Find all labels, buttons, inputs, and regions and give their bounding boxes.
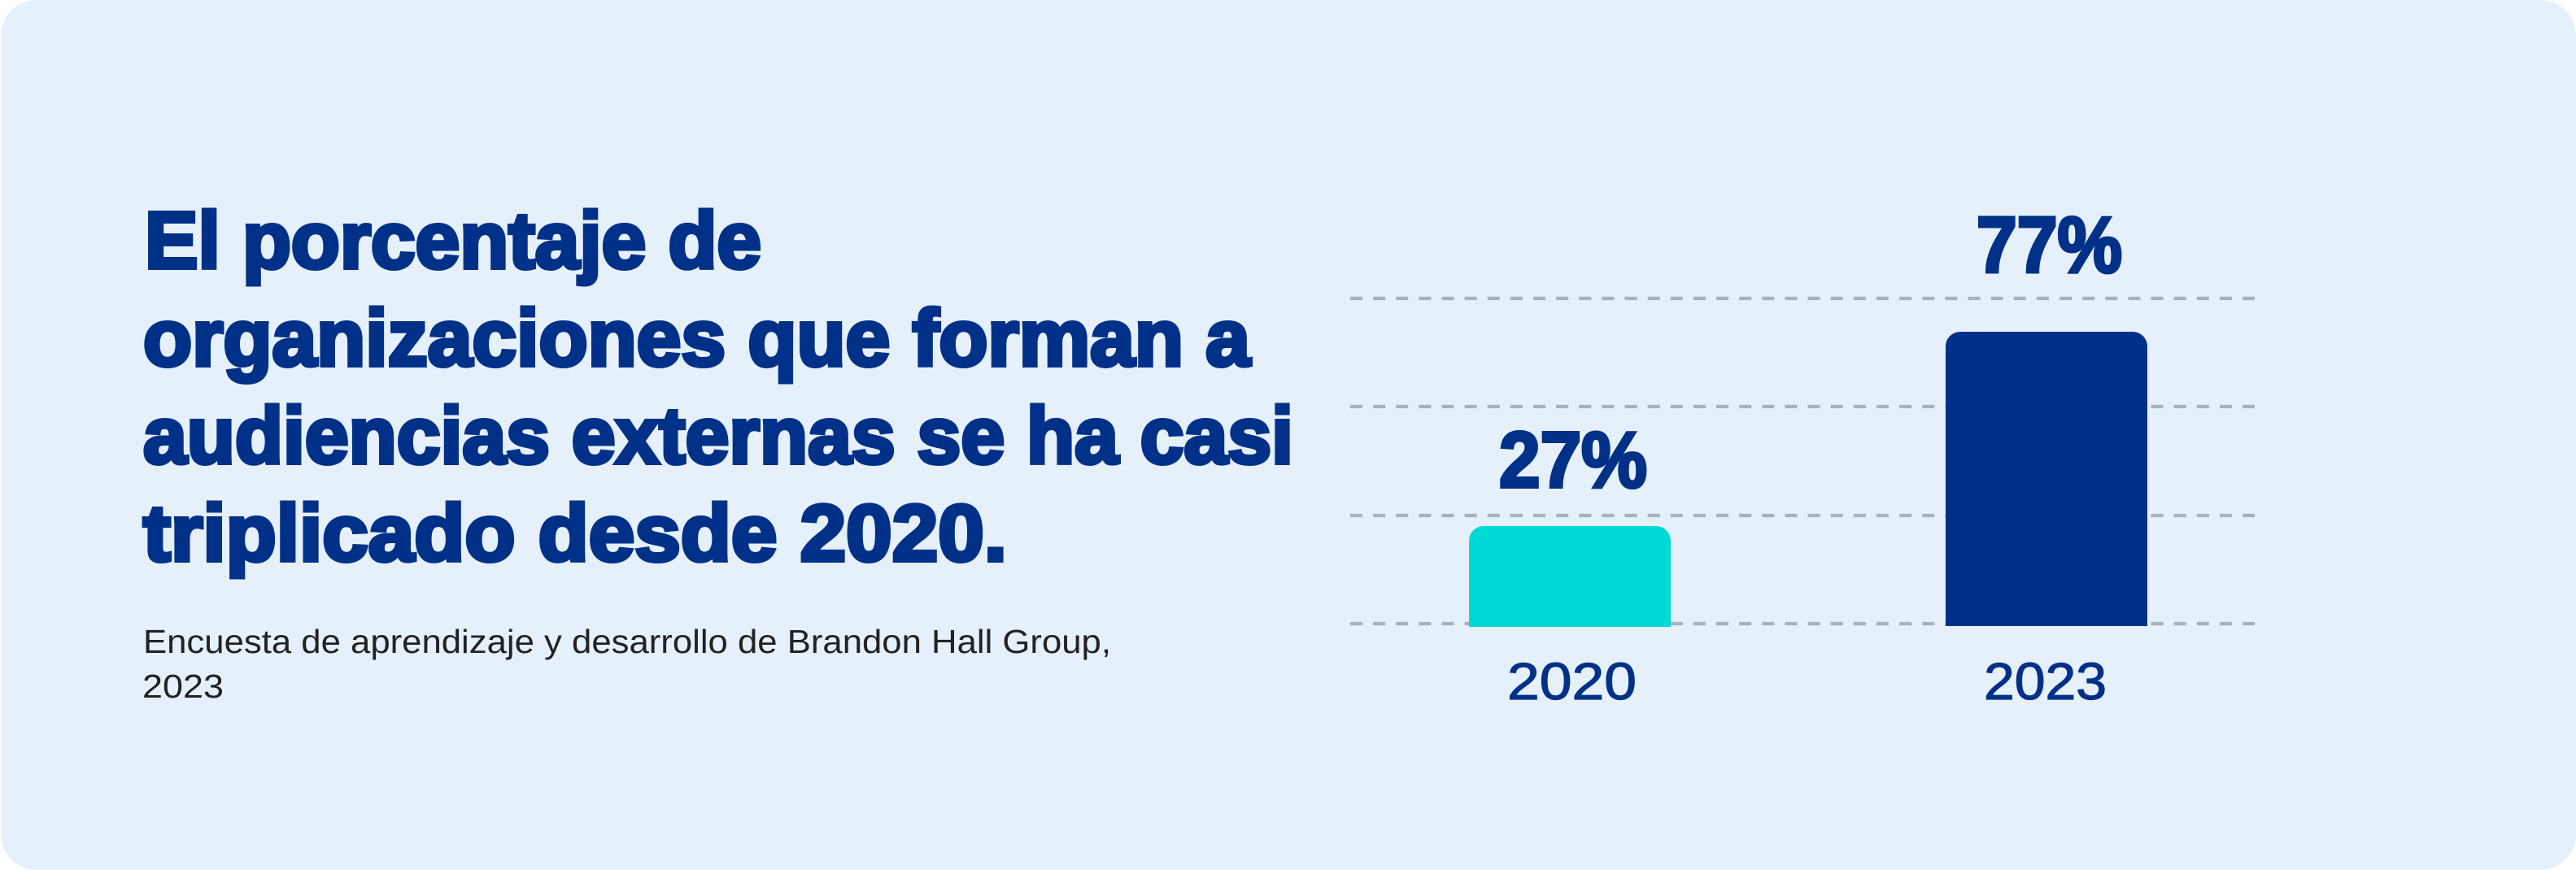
source text: Encuesta de aprendizaje y desarrollo de Brandon Hall Group, [143,623,1111,660]
label: 2020: 2020 [1507,652,1637,711]
heading [143,195,1293,577]
heading: El porcentaje de [145,195,761,285]
value: 27%: 27% [1499,415,1647,504]
source text: 2023 [142,668,224,705]
bar chart [1350,200,2255,711]
heading: triplicado desde 2020. [143,488,1007,577]
heading: audiencias externas se ha casi [143,390,1293,480]
source text [142,623,1111,705]
heading: organizaciones que forman a [143,293,1251,382]
label: 2023: 2023 [1984,652,2107,711]
value: 77%: 77% [1977,200,2122,289]
bar: 2023 [1946,332,2147,626]
bar: 2020 [1469,526,1671,627]
